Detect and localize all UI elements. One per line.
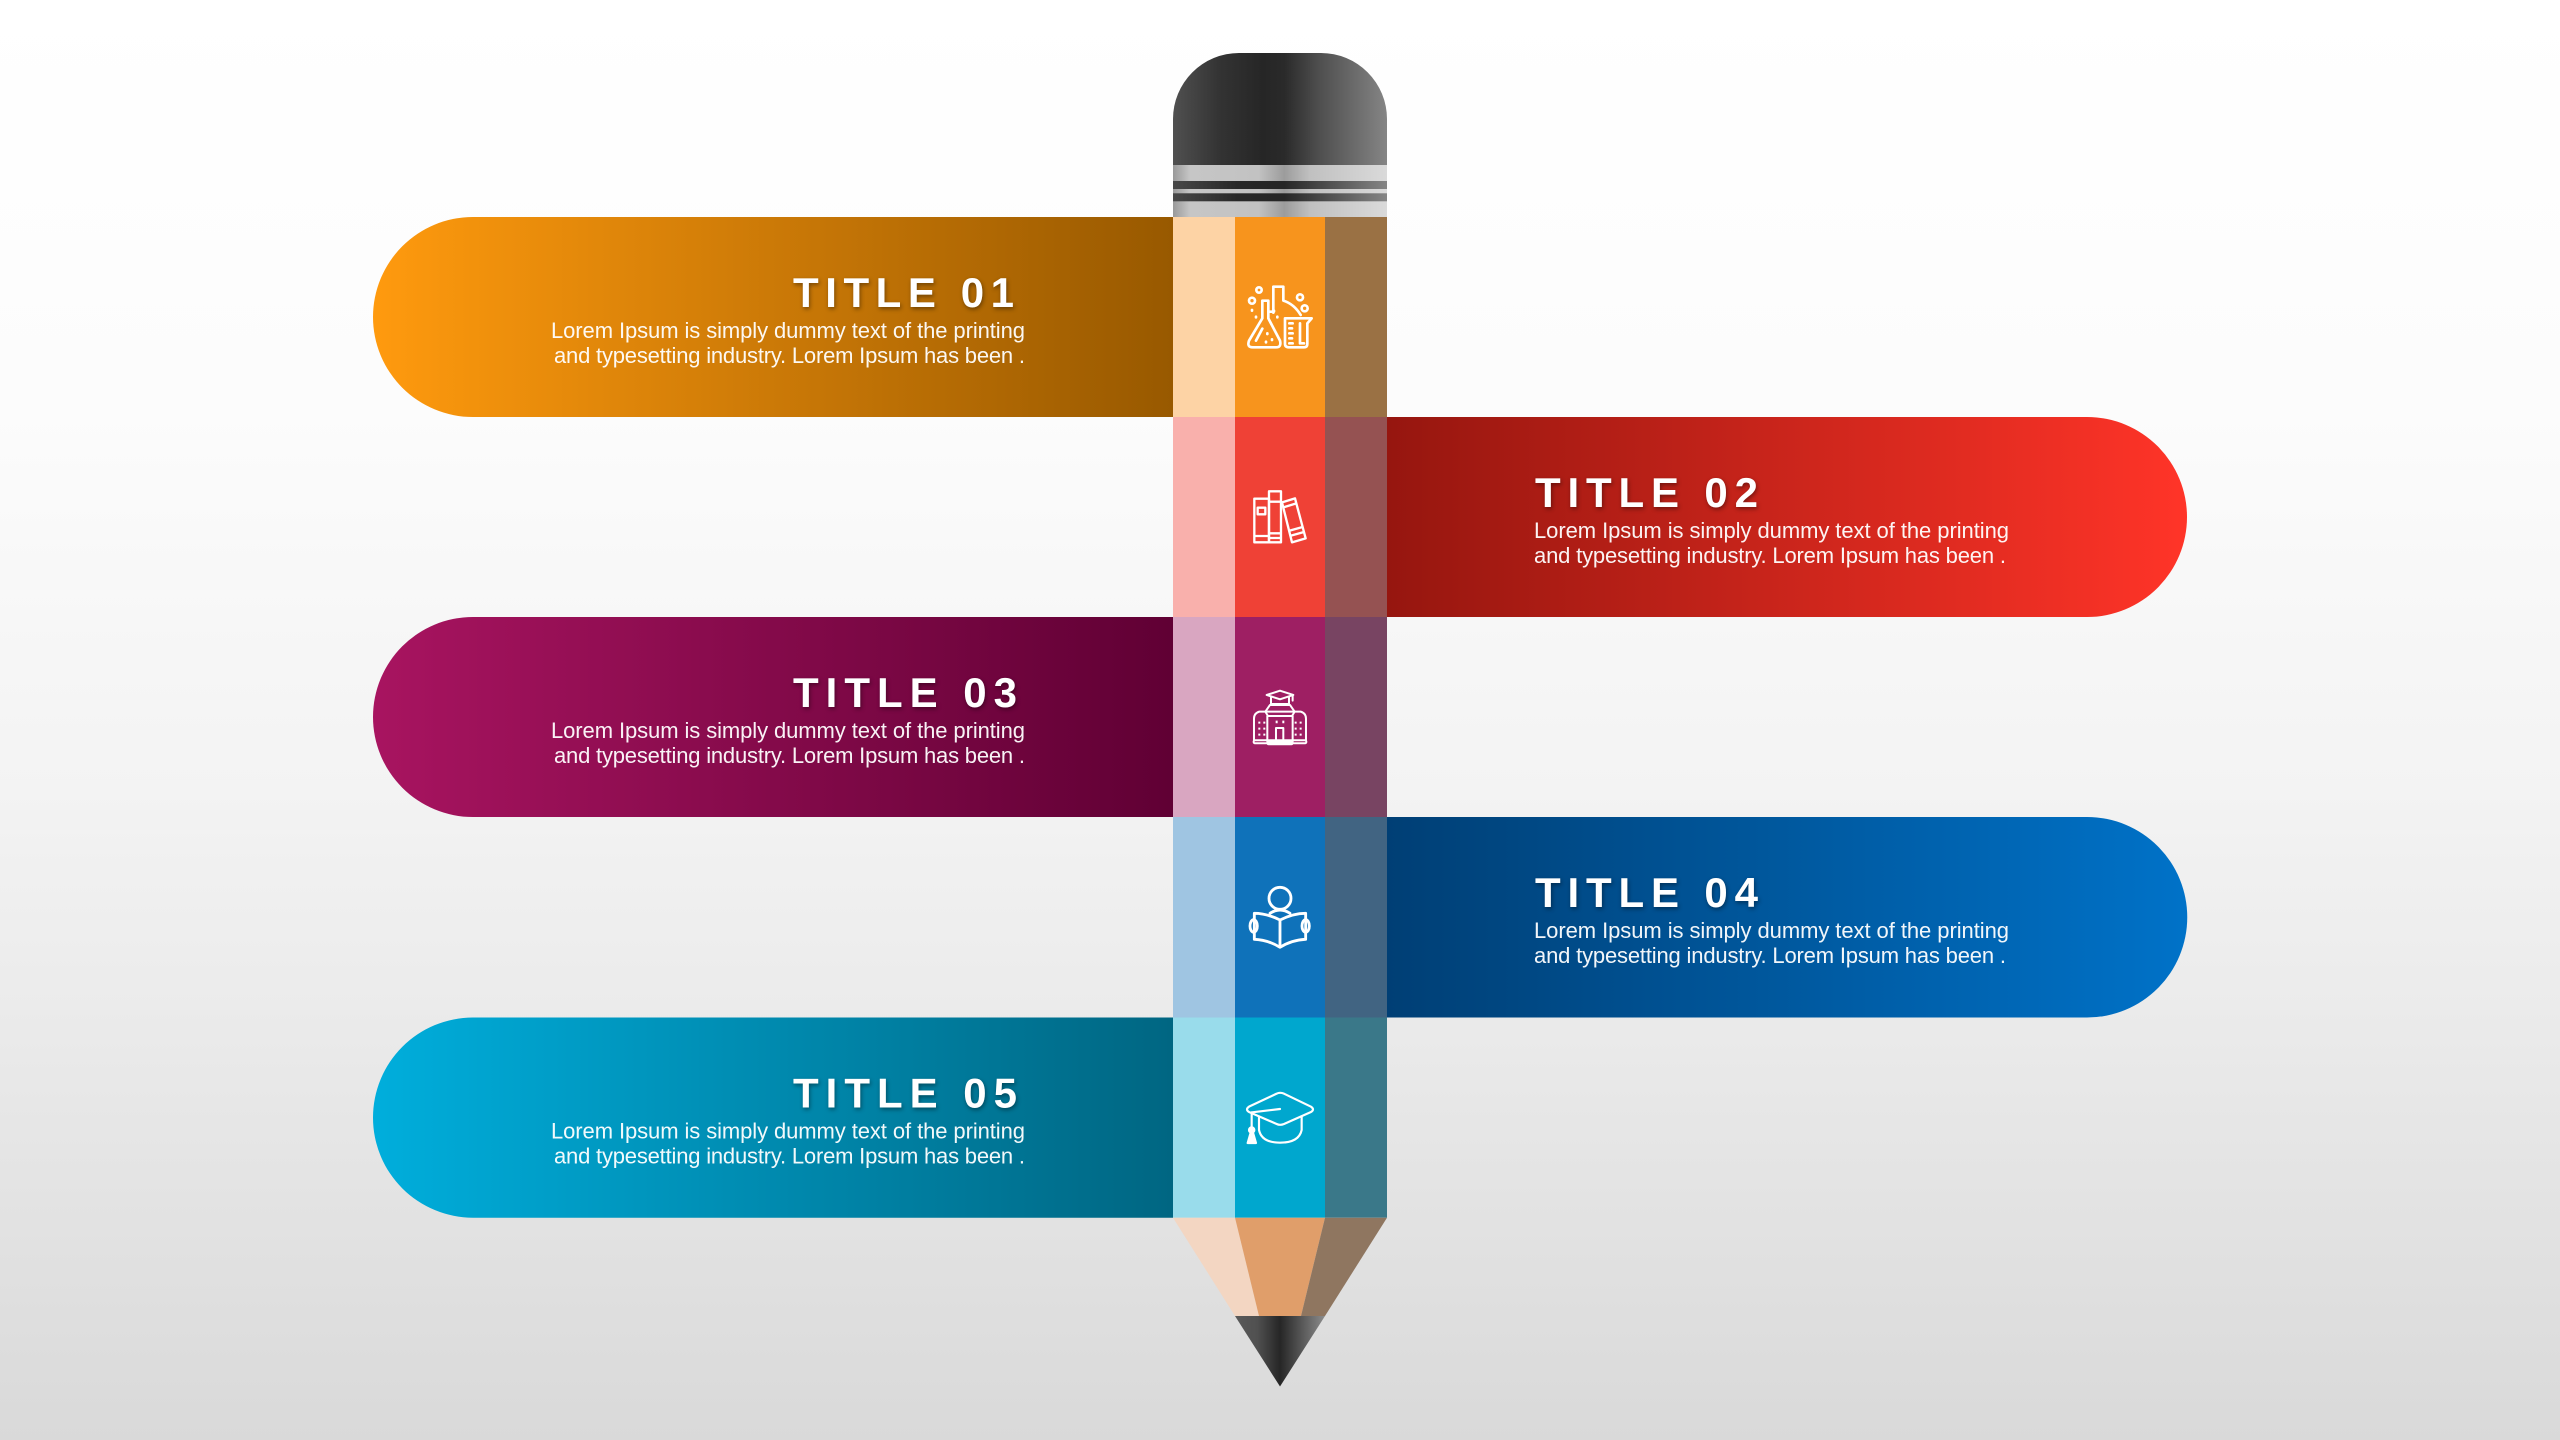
text block 01 [551,318,1025,368]
text block 04: Lorem Ipsum is simply dummy text of the printing [1534,918,2009,943]
heading: title 04: TITLE 04 [1535,869,1759,916]
icon: university [1254,691,1306,744]
heading: title 02: TITLE 02 [1535,469,1758,516]
panel: title 03 banner [373,617,1173,817]
panel: title 05 banner [373,1018,1173,1218]
panel: title 01 banner [373,217,1173,417]
text block 04 [1534,918,2009,968]
text block 05: Lorem Ipsum is simply dummy text of the printing [551,1119,1025,1144]
icon: flasks [1248,287,1312,347]
text block 05: and typesetting industry. Lorem Ipsum has been . [554,1144,1025,1169]
banner shape 03 [373,617,1173,817]
text block 03 [551,718,1025,768]
icon: reader with book [1250,887,1309,947]
text block 02: and typesetting industry. Lorem Ipsum has been . [1534,543,2006,568]
banner shape 04 [1387,817,2187,1018]
text block 02: Lorem Ipsum is simply dummy text of the printing [1534,518,2009,543]
pencil segment 04 blue [1173,817,1387,1018]
pencil wood [1173,1218,1387,1316]
text block 05 [551,1119,1025,1169]
icon: graduation cap [1247,1093,1313,1143]
banner shape 05 [373,1018,1173,1218]
pencil [1173,53,1387,1386]
pencil eraser [1173,53,1387,165]
pencil segment 03 purple [1173,617,1387,817]
heading: title 05: TITLE 05 [793,1070,1017,1116]
text block 03: and typesetting industry. Lorem Ipsum has been . [554,743,1025,768]
panel: title 04 banner [1387,817,2187,1018]
pencil ferrule [1173,165,1387,217]
pencil segment 05 cyan [1173,1018,1387,1218]
text block 01: and typesetting industry. Lorem Ipsum has been . [554,343,1025,368]
banner shape 01 [373,217,1173,417]
heading: title 03: TITLE 03 [793,669,1017,716]
text block 03: Lorem Ipsum is simply dummy text of the printing [551,718,1025,743]
pencil lead tip [1235,1316,1325,1386]
text block 04: and typesetting industry. Lorem Ipsum has been . [1534,943,2006,968]
text block 02 [1534,518,2009,568]
pencil segment 01 orange [1173,217,1387,417]
heading: title 01: TITLE 01 [793,269,1014,316]
pencil segment 02 red [1173,417,1387,617]
text block 01: Lorem Ipsum is simply dummy text of the printing [551,318,1025,343]
panel: title 02 banner [1387,417,2187,617]
icon: books [1254,491,1306,542]
banner shape 02 [1387,417,2187,617]
